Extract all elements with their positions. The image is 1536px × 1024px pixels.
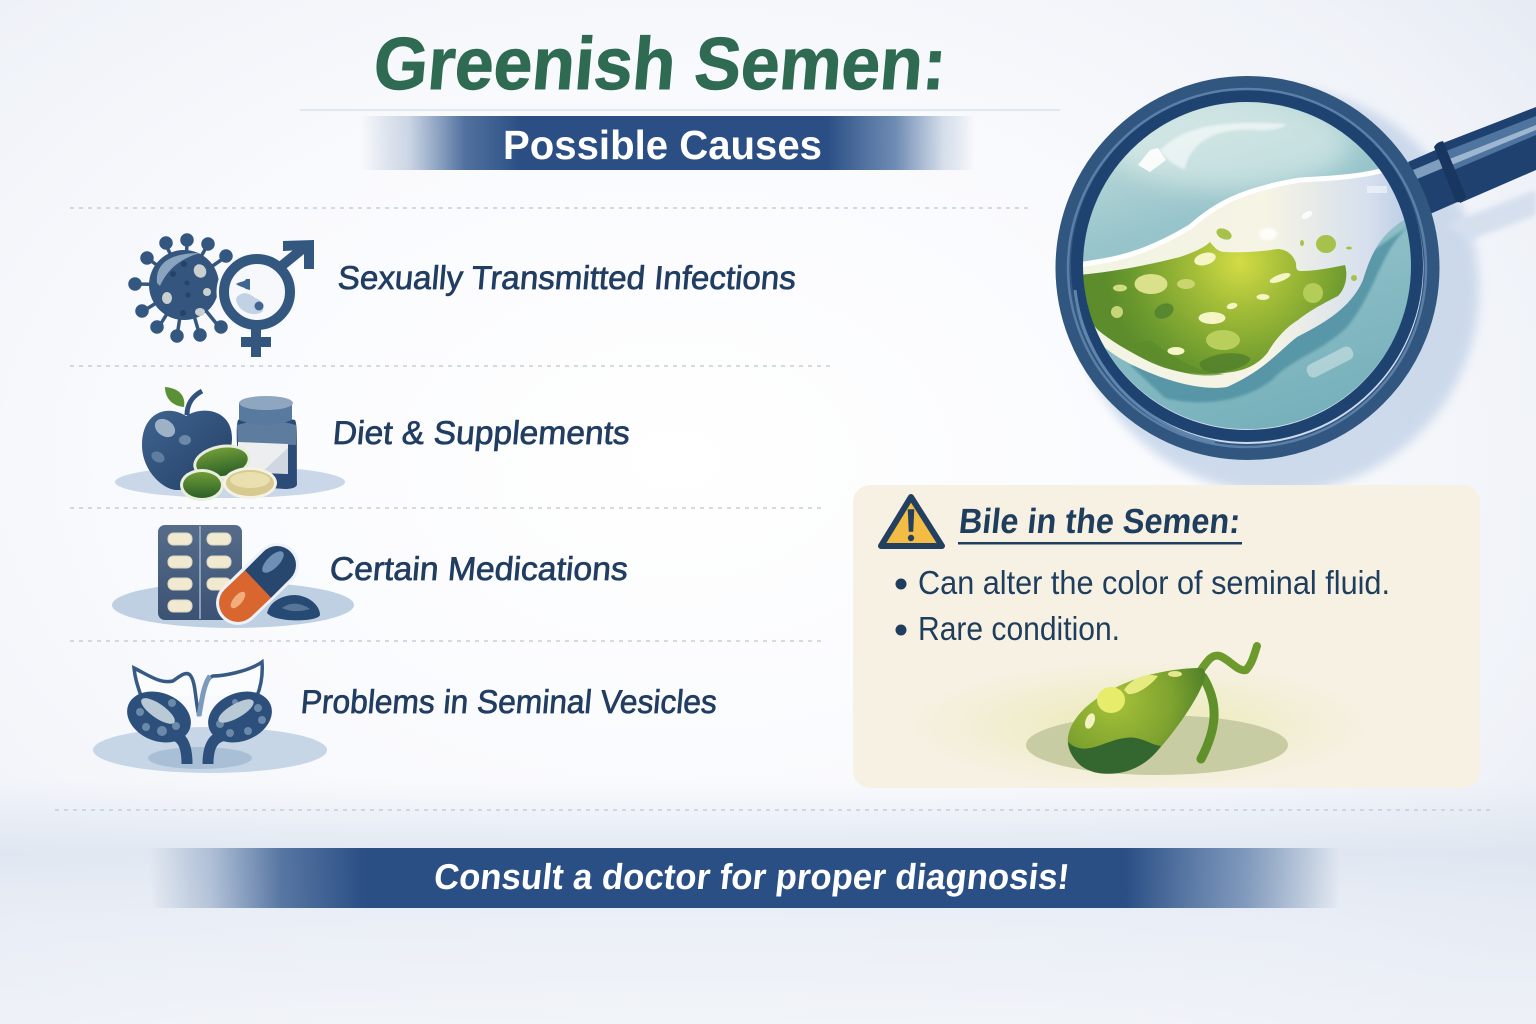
icon: apple, jar and pills [115, 387, 345, 501]
icon: seminal vesicles [93, 662, 327, 773]
icon: gallbladder [1026, 646, 1288, 775]
dotted dividers [55, 208, 1490, 810]
green fluid [1078, 242, 1346, 376]
label: Certain Medications [328, 551, 630, 588]
highlights [1138, 123, 1387, 380]
handle [1408, 107, 1536, 214]
lens interior [1075, 95, 1420, 435]
icon: virus [130, 235, 231, 341]
cause 1: sexually transmitted infections [130, 235, 798, 357]
lens rim [1064, 84, 1432, 452]
subtitle text: Possible Causes [503, 122, 822, 168]
cause 3: certain medications [112, 525, 630, 628]
magnifying glass illustration [1064, 84, 1536, 493]
footer text: Consult a doctor for proper diagnosis! [432, 856, 1071, 897]
icon: warning triangle [881, 497, 942, 546]
panel: bile in the semen [853, 485, 1480, 790]
icon: blister pack and capsule [112, 525, 354, 628]
spoon [1078, 168, 1420, 388]
label: Sexually Transmitted Infections [336, 260, 798, 297]
bullet list [896, 564, 1390, 647]
bullet list: Can alter the color of seminal fluid. [918, 564, 1390, 601]
lens shadow [1073, 87, 1536, 493]
icon: gender symbol [220, 240, 314, 357]
label: Diet & Supplements [331, 415, 632, 452]
bubbles [1111, 209, 1357, 355]
bullet list: Rare condition. [918, 610, 1120, 647]
cause 4: problems in seminal vesicles [93, 662, 719, 773]
subtitle banner [300, 109, 1060, 170]
panel heading: Bile in the Semen: [957, 502, 1242, 541]
cause 2: diet and supplements [115, 387, 632, 501]
label: Problems in Seminal Vesicles [299, 684, 719, 721]
footer banner [150, 848, 1340, 908]
title: Greenish Semen: [371, 22, 950, 105]
